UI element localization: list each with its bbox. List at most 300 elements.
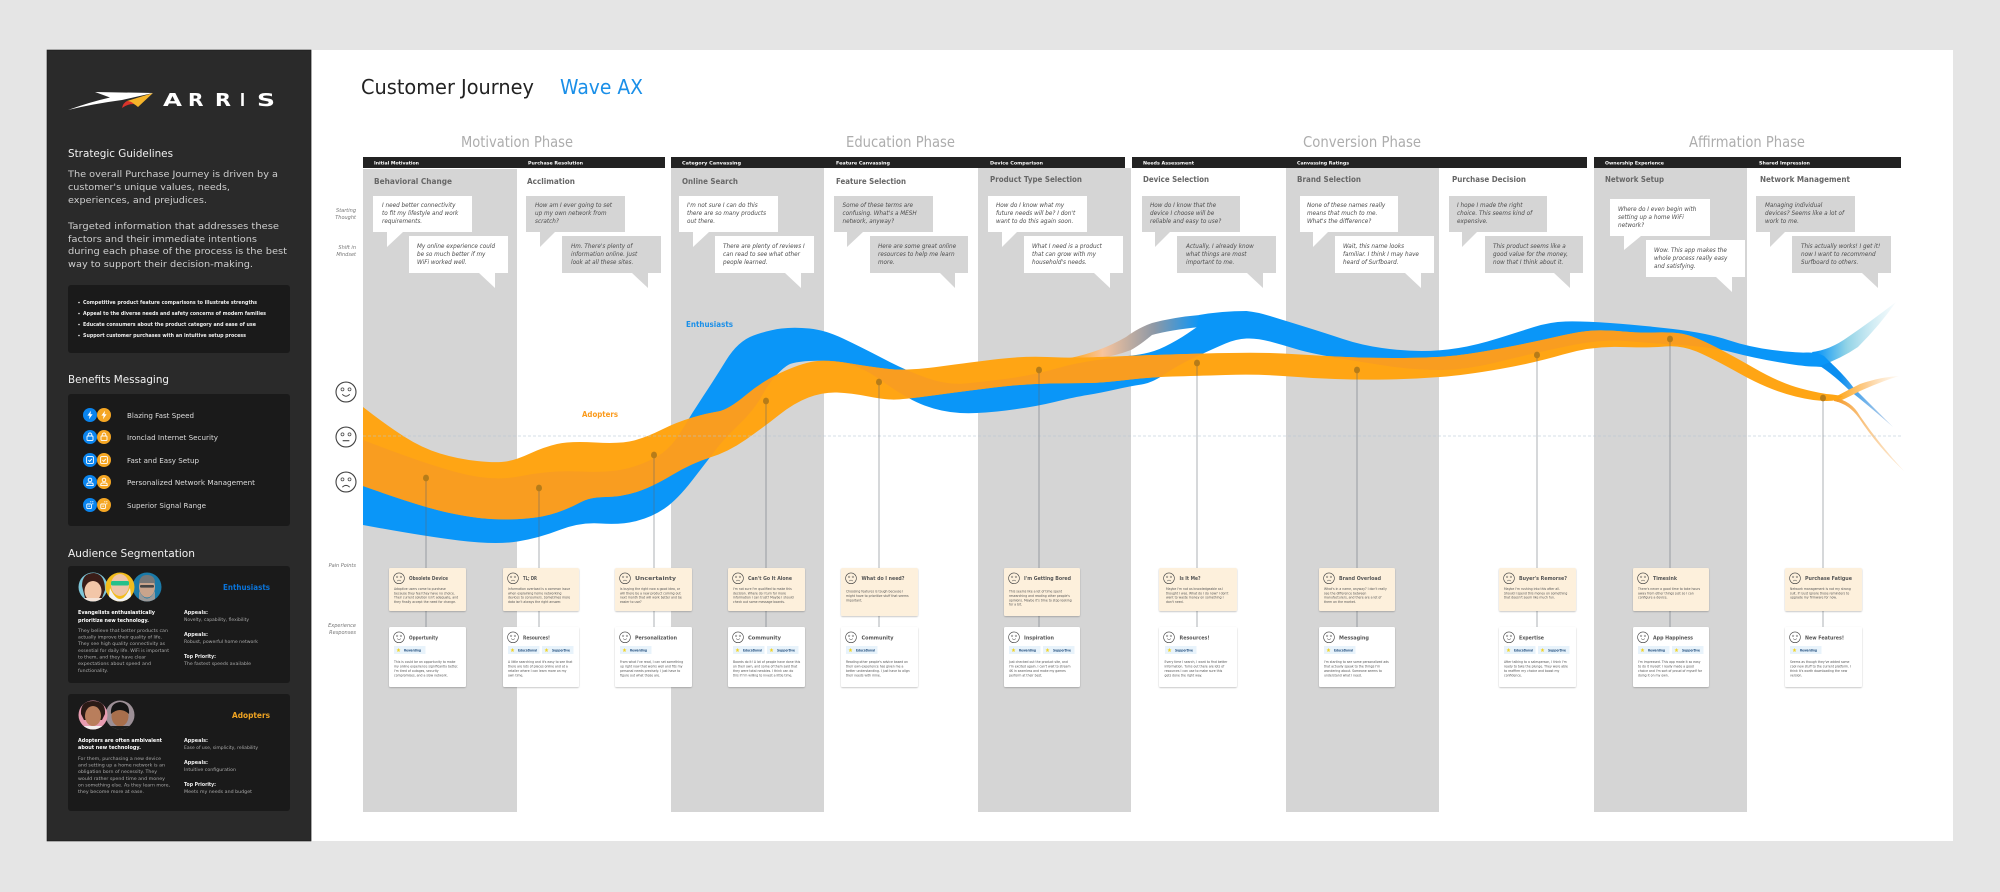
speech bubbles: Online Search: out there.	[687, 219, 715, 225]
heading: phase titles: Conversion Phase	[1303, 133, 1421, 151]
response: New Features!: Seems as though they've added some	[1790, 660, 1849, 664]
phase bars: Feature Canvassing	[836, 160, 890, 166]
response: Community (educational): Reading other people's advice based on	[846, 660, 908, 664]
text block: adopters description: they become more at ease.	[78, 789, 144, 795]
response: App Happiness: I'm impressed. This app made it so easy	[1638, 660, 1701, 664]
speech bubbles: Brand Selection: familiar. I think I may have	[1343, 252, 1419, 258]
speech bubbles: Network Management: This actually works! I get it!	[1801, 244, 1880, 250]
response: Opportunity: my online experience significantly better.	[394, 664, 458, 668]
text block: strategic guidelines body: factors and their immediate intentions	[68, 235, 257, 245]
response: Community (educational): Educational	[856, 648, 875, 652]
response: Community: on their own, and some of them said that	[733, 664, 798, 668]
pain point: Brand Overload: see the difference between	[1324, 591, 1366, 595]
ribbon overlap shading	[363, 330, 1722, 520]
logo: ARRIS: R	[188, 90, 204, 111]
text block: adopters appeals: Appeals:	[184, 760, 208, 766]
speech bubbles: Acclimation: scratch?	[535, 219, 559, 225]
speech bubbles: Network Setup: Where do I even begin with	[1618, 207, 1697, 213]
response: Community (educational): their needs with mine.	[846, 674, 881, 678]
phase bars: Needs Assessment	[1143, 160, 1195, 166]
text block: enthusiasts description: prioritize new technology.	[78, 618, 149, 624]
text block: adopters description	[78, 738, 170, 795]
text block: adopters description: and setting up a home network is an	[78, 762, 165, 768]
speech bubbles: Product Type Selection: How do I know what my	[996, 203, 1065, 209]
logo: ARRIS: A	[163, 90, 182, 111]
speech bubbles: Online Search: there are so many products	[687, 211, 766, 217]
response: Personalization: From what I've read, I can set something	[620, 660, 683, 664]
row labels: Starting	[336, 208, 356, 214]
pain point: Uncertainty: easier to use?	[620, 600, 642, 604]
response: Opportunity	[389, 627, 466, 687]
ribbon: enthusiast fade-out branch	[1812, 302, 1896, 366]
heading: stage titles: Brand Selection	[1297, 175, 1361, 184]
text block: enthusiasts description	[77, 610, 169, 674]
text block: adopters description: For them, purchasing a new device	[78, 756, 161, 762]
pain point: Timesink: away from other things just so I can	[1638, 591, 1694, 595]
speech bubbles: Behavioral Change	[373, 196, 508, 288]
heading: stage titles: Product Type Selection	[990, 175, 1082, 184]
heading: Audience Segmentation: Audience Segmentation	[68, 548, 195, 560]
phase bars: Category Canvassing	[682, 160, 741, 166]
text block: enthusiasts description: actually improve their quality of life.	[78, 634, 162, 640]
pain point: Can't Go It Alone: Can't Go It Alone	[748, 576, 792, 582]
response: Resources! (supportive): resources I can use to make sure this	[1164, 669, 1223, 673]
speech bubbles: Device Selection: what things are most	[1186, 252, 1247, 258]
text block: enthusiasts description: expectations about speed and	[78, 661, 151, 667]
label: fast and easy setup: Fast and Easy Setup	[127, 457, 199, 465]
pain point: Buyer's Remorse?: Should I spend this money on something	[1504, 591, 1567, 595]
pain point: I'm Getting Bored	[1004, 568, 1080, 616]
pin markers	[423, 336, 1826, 491]
ribbon: adopter-to-enthusiast transition	[1070, 315, 1200, 358]
pain point: What do I need?: important.	[846, 598, 862, 602]
response: App Happiness: App Happiness	[1653, 636, 1693, 642]
text block: adopters appeals: Top Priority:	[184, 782, 216, 788]
response: App Happiness: Rewarding	[1648, 648, 1665, 652]
pain point: Is It Me?: Is It Me?	[1180, 576, 1200, 582]
response: Resources!: Educational	[518, 648, 537, 652]
response: Inspiration: perform at their best.	[1009, 674, 1042, 678]
logo: ARRIS: I	[240, 90, 245, 111]
response: Resources! (supportive)	[1159, 627, 1237, 687]
phase bars: Canvassing Ratings	[1297, 160, 1349, 166]
pain point: Is It Me?: want to waste money on something I	[1166, 596, 1224, 600]
speech bubbles: Purchase Decision: expensive.	[1457, 219, 1488, 225]
heading: stage titles: Network Management	[1760, 175, 1850, 184]
text block: enthusiasts description: They see high quality connectivity as	[77, 641, 166, 647]
response: Opportunity: I'm tired of outages, security	[394, 669, 439, 673]
icon: personalized network management	[83, 475, 111, 489]
text block: strategic guidelines body: experiences, and prejudices.	[68, 196, 207, 206]
icon: fast and easy setup	[83, 453, 111, 467]
speech bubbles: Purchase Decision: This product seems like a	[1493, 244, 1566, 250]
speech bubbles: Brand Selection: None of these names really	[1307, 203, 1386, 209]
row labels: Thought	[335, 215, 357, 221]
response: Opportunity: Rewarding	[404, 648, 421, 652]
pain point: TL; DR: data isn't always the right answer.	[508, 600, 561, 604]
heading: stage titles: Feature Selection	[836, 177, 906, 186]
pain point: TL; DR: devices to consumers. Sometimes more	[508, 596, 570, 600]
speech bubbles: Online Search	[679, 196, 814, 288]
heading: phase titles	[461, 133, 1805, 151]
response: Personalization: figure out what those are.	[620, 674, 660, 678]
row labels: Shift in	[338, 245, 356, 251]
speech bubbles: Network Management: devices? Seems like a lot of	[1765, 211, 1845, 217]
speech bubbles: Brand Selection: What's the difference?	[1307, 219, 1371, 225]
response: Resources!: Resources!	[523, 636, 550, 642]
response: Expertise: confidence.	[1504, 674, 1522, 678]
speech bubbles: Device Selection	[1142, 196, 1276, 288]
pain point: Timesink	[1633, 568, 1709, 611]
pain point: Brand Overload	[1319, 568, 1395, 611]
speech bubbles: Network Management: Managing individual	[1765, 203, 1823, 209]
text block: adopters appeals: Ease of use, simplicity, reliability	[184, 745, 258, 751]
pain point: Is It Me?: thought I was. What do I do now? I don't	[1166, 591, 1229, 595]
speech bubbles: Network Setup: setting up a home WiFi	[1618, 215, 1684, 221]
label: ironclad internet security: Ironclad Internet Security	[127, 434, 218, 442]
pain point: Buyer's Remorse?: Maybe I'm rushing into this after all.	[1504, 587, 1560, 591]
phase bars	[363, 157, 1901, 168]
speech bubbles: Product Type Selection	[988, 196, 1123, 288]
response: Expertise: to reaffirm my choice and boost my	[1504, 669, 1560, 673]
heading: Benefits Messaging: Benefits Messaging	[68, 374, 169, 386]
pain point: Can't Go It Alone	[728, 568, 805, 611]
text block: enthusiasts description: They believe that better products can	[77, 628, 168, 634]
response: Community (educational)	[841, 627, 918, 687]
pain point: Can't Go It Alone: information I can trust? Maybe I should	[733, 596, 794, 600]
heading: stage titles: Purchase Decision	[1452, 175, 1526, 184]
ribbon: adopter fade-out branch	[1835, 376, 1899, 402]
speech bubbles: Acclimation: look at all these sites.	[571, 260, 633, 266]
response: Resources! (supportive): Resources!	[1180, 636, 1210, 642]
speech bubbles: Feature Selection: resources to help me learn	[878, 252, 955, 258]
pain point: Is It Me?: don't need.	[1166, 600, 1184, 604]
speech bubbles: Device Selection: Actually, I already know	[1185, 244, 1254, 250]
speech bubbles: Purchase Decision: good value for the money,	[1493, 252, 1568, 258]
response: Expertise: Educational	[1514, 648, 1533, 652]
response: Personalization: Personalization	[635, 636, 677, 642]
speech bubbles: Product Type Selection: want to do this again soon.	[996, 219, 1073, 225]
label: Adopters ribbon: Adopters	[582, 410, 618, 419]
text block: adopters description: about new technology.	[78, 745, 141, 751]
response: Community: this if I'm willing to invest a little time.	[733, 674, 792, 678]
pain point: TL; DR: Information overload is a common issue	[508, 587, 570, 591]
pain point: Purchase Fatigue: suit. If I just ignore those reminders to	[1790, 591, 1849, 595]
speech bubbles: Feature Selection	[834, 196, 968, 288]
pain point: I'm Getting Bored: for a bit.	[1009, 603, 1022, 607]
row labels: Responses	[329, 630, 356, 636]
pain point: Brand Overload: them on the market.	[1324, 600, 1356, 604]
response: App Happiness: to do it myself. I really made a good	[1638, 664, 1694, 668]
response: Inspiration	[1004, 627, 1080, 687]
response: Resources!: there are lots of places online and at a	[508, 664, 568, 668]
row labels: Mindset	[336, 252, 357, 258]
response: Messaging: understand what I need.	[1324, 674, 1362, 678]
pain point: Can't Go It Alone: check out some message boards.	[733, 600, 785, 604]
response: Community (educational): better understanding. I just have to align	[846, 669, 910, 673]
text block: enthusiasts appeals: Top Priority:	[184, 654, 216, 660]
pain point: Timesink: There's never a good time to take hours	[1637, 587, 1701, 591]
phase bars: Initial Motivation	[374, 160, 419, 166]
pain point: What do I need?: Choosing features is tough because I	[846, 590, 903, 594]
pain point: What do I need?	[841, 568, 918, 616]
speech bubbles: Brand Selection: heard of Surfboard.	[1343, 260, 1399, 266]
label: Enthusiasts ribbon: Enthusiasts	[686, 320, 733, 329]
pain point: Obsolete Device	[389, 568, 466, 611]
speech bubbles: Product Type Selection: future needs will be? I don't	[996, 211, 1076, 217]
text block: adopters appeals: Meets my needs and budget	[184, 789, 252, 795]
icon: superior signal range	[83, 498, 111, 512]
response: Expertise: After talking to a salesperson, I think I'm	[1504, 660, 1567, 664]
speech bubbles: Behavioral Change: I need better connectivity	[382, 203, 456, 209]
speech bubbles: Network Setup: network?	[1618, 223, 1644, 229]
pain point: What do I need?: might have to prioritize stuff that seems	[846, 594, 909, 598]
speech bubbles: Network Setup	[1610, 199, 1745, 292]
response: Community (educational): Community	[862, 636, 894, 642]
pain point: Obsolete Device: because they feel they have no choice.	[394, 591, 455, 595]
text block: enthusiasts description: essential for daily life. WiFi is important	[78, 648, 169, 654]
speech bubbles: Online Search: people learned.	[722, 260, 768, 266]
response: Opportunity: This is could be an opportunity to make	[393, 660, 455, 664]
text block: adopters appeals: Appeals:	[184, 738, 208, 744]
speech bubbles: Device Selection: reliable and easy to use?	[1150, 219, 1221, 225]
pain point: Obsolete Device: Obsolete Device	[409, 576, 448, 582]
speech bubbles: Feature Selection: Some of these terms are	[842, 203, 914, 209]
response: Messaging: Messaging	[1339, 636, 1369, 642]
heading: stage titles: Online Search	[682, 177, 738, 186]
text block: strategic guidelines body: way to support their decision-making.	[68, 260, 253, 270]
response: New Features!: New Features!	[1805, 636, 1844, 642]
text block: adopters description: Adopters are often ambivalent	[78, 738, 162, 744]
row labels: Experience	[328, 623, 356, 629]
panel: adopters	[68, 694, 290, 811]
pain point: Brand Overload: What's in a name, anyway? I don't really	[1324, 587, 1387, 591]
speech bubbles: Feature Selection: more.	[878, 260, 895, 266]
speech bubbles: Purchase Decision: now that I think about it.	[1493, 260, 1564, 266]
speech bubbles: Online Search: can read to see what other	[723, 252, 801, 258]
response: Community: Boards do it! A lot of people have done this	[733, 660, 801, 664]
speech bubbles: Network Setup: whole process really easy	[1654, 256, 1728, 262]
heading: stage titles	[374, 175, 1850, 186]
speech bubbles: Behavioral Change: requirements.	[382, 219, 422, 225]
text block: adopters description: on something else. As they learn more,	[78, 782, 170, 788]
response: Opportunity: Opportunity	[409, 636, 438, 642]
heading: Strategic Guidelines: Strategic Guidelines	[68, 148, 173, 160]
response: Expertise: ready to take the plunge. They were able	[1504, 664, 1568, 668]
pain point: Can't Go It Alone: decision. Where do I turn for more	[733, 591, 786, 595]
pain point: What do I need?: What do I need?	[862, 576, 904, 582]
text block: enthusiasts appeals	[183, 610, 258, 667]
label: superior signal range: Superior Signal Range	[127, 502, 206, 510]
text block: strategic guidelines body: The overall Purchase Journey is driven by a	[67, 170, 278, 180]
pain point: Uncertainty	[615, 568, 692, 611]
pain point: Can't Go It Alone: I'm not sure I'm qualified to make this	[733, 587, 792, 591]
speech bubbles: Behavioral Change: to fit my lifestyle and work	[382, 211, 459, 217]
phase bars: Purchase Resolution	[528, 160, 583, 166]
speech bubbles: Purchase Decision: I hope I made the right	[1457, 203, 1523, 209]
pain point: Buyer's Remorse?: Buyer's Remorse?	[1519, 576, 1567, 582]
response: Inspiration: Supportive	[1053, 648, 1071, 652]
response: Opportunity: compromises, and a slow network.	[394, 674, 448, 678]
panel: benefits list	[68, 394, 290, 526]
pain point: I'm Getting Bored: This seems like a lot of time spent	[1008, 590, 1063, 594]
response: Community: Educational	[743, 648, 762, 652]
response: Expertise: Supportive	[1548, 648, 1566, 652]
panel: guideline bullets: Appeal to the diverse needs and safety concerns of modern families	[83, 311, 266, 317]
ribbon: adopter tapered tail	[1834, 398, 1904, 471]
speech bubbles: Brand Selection	[1300, 196, 1434, 288]
heading: phase titles: Affirmation Phase	[1689, 133, 1805, 151]
label: blazing fast speed: Blazing Fast Speed	[127, 412, 194, 420]
pain point: Timesink: configure a device.	[1638, 596, 1668, 600]
panel: guideline bullets: Educate consumers about the product category and ease of use	[83, 322, 256, 328]
response: Community (educational): their own experience has given me a	[846, 664, 904, 668]
text block: adopters appeals: Intuitive configuration	[184, 767, 236, 773]
label: personalized network management: Personalized Network Management	[127, 479, 255, 487]
title: Customer Journey: Customer Journey	[361, 75, 534, 99]
response: App Happiness: doing it on my own.	[1638, 674, 1669, 678]
text block: adopters description: obligation born of necessity. They	[78, 769, 157, 775]
response: Messaging: that actually speak to the things I'm	[1324, 664, 1380, 668]
photos: enthusiasts	[78, 572, 162, 602]
speech bubbles: Product Type Selection: household's needs.	[1032, 260, 1087, 266]
speech bubbles: Feature Selection: confusing. What's a MESH	[842, 211, 917, 217]
response: Messaging: I'm starting to see some personalized ads	[1324, 660, 1389, 664]
phase columns	[363, 168, 1747, 812]
pain point: Brand Overload: manufacturers, and there are a lot of	[1324, 596, 1382, 600]
pain point: Purchase Fatigue: upgrade my firmware for now.	[1790, 596, 1837, 600]
pain point: I'm Getting Bored: opinions. Maybe it's time to stop looking	[1009, 598, 1072, 602]
speech bubbles: Device Selection: How do I know that the	[1150, 203, 1217, 209]
pain point: Uncertainty: Uncertainty	[635, 576, 677, 582]
text block: strategic guidelines body: customer's unique values, needs,	[68, 183, 230, 193]
response: Inspiration: Inspiration	[1024, 636, 1054, 642]
response: Resources! (supportive): information. Turns out there are lots of	[1164, 664, 1225, 668]
speech bubbles: Device Selection: device I choose will be	[1150, 211, 1215, 217]
row labels: Pain Points	[329, 563, 356, 569]
phase bars: Shared Impression	[1759, 160, 1810, 166]
response: Resources!: retailer where I can learn more on my	[508, 669, 567, 673]
pain point: I'm Getting Bored: I'm Getting Bored	[1024, 576, 1071, 582]
pain point: Brand Overload: Brand Overload	[1339, 576, 1381, 582]
panel: enthusiasts	[68, 566, 290, 683]
speech bubbles: Acclimation: Hm. There's plenty of	[571, 244, 633, 250]
heading: phase titles: Education Phase	[846, 133, 955, 151]
pain point: Uncertainty: next month that will work better and be	[620, 596, 682, 600]
speech bubbles: Acclimation: How am I ever going to set	[535, 203, 613, 209]
response: Resources!	[503, 627, 579, 687]
response: App Happiness: choice and I'm sort of proud of myself for	[1638, 669, 1703, 673]
logo: ARRIS	[68, 90, 275, 111]
heading: stage titles: Network Setup	[1605, 175, 1665, 184]
pain point: Obsolete Device: they finally accept the need for change.	[394, 600, 456, 604]
pain point: Purchase Fatigue: Network management is not my strong	[1790, 587, 1851, 591]
pain point: TL; DR	[503, 568, 579, 611]
speech bubbles: Behavioral Change: WiFi worked well.	[417, 260, 467, 266]
response: Messaging	[1319, 627, 1395, 687]
pain point: Buyer's Remorse?	[1499, 568, 1576, 611]
response: New Features!: Rewarding	[1800, 648, 1817, 652]
response: Resources! (supportive): gets done the right way.	[1164, 674, 1202, 678]
pain point: Is It Me?: Maybe I'm not as knowledgeable as I	[1166, 587, 1223, 591]
speech bubbles: Behavioral Change: be so much better if my	[417, 252, 486, 258]
icon: sentiment scale faces	[336, 382, 356, 492]
speech bubbles: Device Selection: important to me.	[1186, 260, 1234, 266]
pain point: Purchase Fatigue: Purchase Fatigue	[1805, 576, 1852, 582]
speech bubbles: Product Type Selection: that can grow with my	[1032, 252, 1097, 258]
speech bubbles: Feature Selection: network, anyway?	[842, 219, 894, 225]
text block: enthusiasts appeals: Appeals:	[184, 610, 208, 616]
response: App Happiness: Supportive	[1682, 648, 1700, 652]
response: Personalization: Rewarding	[630, 648, 647, 652]
response: New Features!: version.	[1790, 674, 1802, 678]
speech bubbles: Network Setup: and satisfying.	[1654, 264, 1696, 270]
text block: enthusiasts appeals: Novelty, capability, flexibility	[184, 617, 249, 623]
text block: enthusiasts description: functionality.	[78, 668, 108, 674]
panel: customer journey map	[312, 50, 1953, 841]
response: App Happiness	[1633, 627, 1709, 687]
speech bubbles: Network Setup: Wow. This app makes the	[1654, 248, 1727, 254]
pain point: Uncertainty: Is buying the right now a good idea, or	[620, 587, 681, 591]
speech bubbles: Purchase Decision: choice. This seems kind of	[1457, 211, 1533, 217]
phase bars: Device Comparison	[990, 160, 1043, 166]
heading: stage titles: Acclimation	[527, 177, 575, 186]
response: Personalization: up right now that works well and fits my	[620, 664, 683, 668]
speech bubbles: Brand Selection: means that much to me.	[1307, 211, 1378, 217]
pain point: Uncertainty: will there be a new product coming out	[620, 591, 681, 595]
response: Expertise	[1499, 627, 1576, 687]
text block: enthusiasts description: to them, and they have clear	[78, 654, 146, 660]
response: Personalization	[615, 627, 692, 687]
response: Inspiration: Just checked out the product site, and	[1008, 660, 1068, 664]
text block: enthusiasts appeals: Robust, powerful home network	[184, 639, 258, 645]
icon: ironclad internet security	[83, 430, 111, 444]
response: New Features!	[1785, 627, 1862, 687]
response: Resources!: Supportive	[552, 648, 570, 652]
text block: enthusiasts description: Evangelists enthusiastically	[78, 610, 155, 616]
heading: stage titles: Behavioral Change	[374, 177, 452, 186]
response: Resources! (supportive): Supportive	[1175, 648, 1193, 652]
response: Resources!: A little searching and it's easy to see that	[508, 660, 573, 664]
speech bubbles: Acclimation	[526, 196, 661, 288]
heading: phase titles: Motivation Phase	[461, 133, 573, 151]
pain point: Obsolete Device: Their current solution isn't adequate, and	[393, 596, 458, 600]
response: Inspiration: I'm excited again. I can't wait to stream	[1009, 664, 1070, 668]
response: Personalization: personal needs precisely. I just have to	[620, 669, 680, 673]
speech bubbles: Acclimation: up my own network from	[535, 211, 607, 217]
speech bubbles: Network Management: Surfboard to others.	[1801, 260, 1859, 266]
pain point: TL; DR: TL; DR	[523, 576, 538, 582]
response: Community	[728, 627, 805, 687]
response: Community: they were total newbies. I think can do	[733, 669, 793, 673]
speech bubbles: Network Management	[1756, 196, 1891, 288]
ribbon: enthusiast tapered tail	[1820, 362, 1893, 427]
pain point: Is It Me?	[1159, 568, 1237, 611]
text block: adopters appeals	[184, 738, 258, 795]
response: Inspiration: Rewarding	[1019, 648, 1036, 652]
pain point: TL; DR: when explaining home networking	[508, 591, 561, 595]
text block: strategic guidelines body: Targeted information that addresses these	[67, 222, 280, 232]
photos: adopters	[78, 700, 134, 732]
phase bars: Ownership Experience	[1605, 160, 1664, 166]
logo: ARRIS: R	[215, 90, 231, 111]
speech bubbles: Product Type Selection: What I need is a product	[1032, 244, 1103, 250]
speech bubbles: Behavioral Change: My online experience could	[417, 244, 495, 250]
pain point: Purchase Fatigue	[1785, 568, 1862, 611]
response: Expertise: Expertise	[1519, 636, 1544, 642]
speech bubbles: Acclimation: information online. Just	[571, 252, 638, 258]
response: Community: Community	[748, 636, 781, 642]
